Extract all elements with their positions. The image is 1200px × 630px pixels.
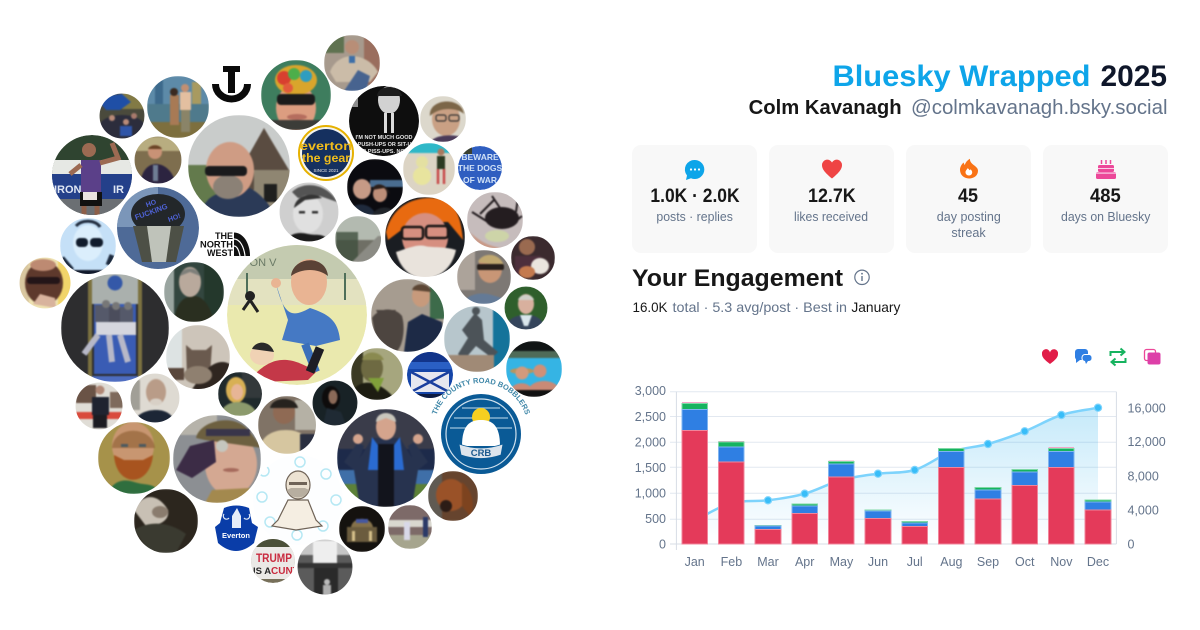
right axis labels: 8,000 (1128, 470, 1159, 484)
avatar: couple at night (347, 159, 403, 215)
avatar: Beware the Dogs of War sign: THE DOGS (458, 163, 503, 173)
month labels: Sep (977, 555, 999, 569)
heading: Your Engagement: Your Engagement (632, 265, 843, 292)
avatar: Everton crest (215, 506, 258, 551)
chart: monthly engagement stacked bars with cumulative line (635, 384, 1166, 569)
avatar: smiling bald man in navy (130, 373, 180, 423)
chart grid (670, 392, 1116, 550)
avatar: smiling man with glasses (420, 96, 466, 142)
right axis labels (1128, 401, 1166, 552)
left axis labels: 1,000 (635, 486, 666, 500)
avatar: Everton crest: Everton (222, 531, 250, 540)
avatar: seated man in beige (324, 35, 380, 91)
icon: likes heart (1042, 349, 1058, 364)
left axis labels: 2,000 (635, 436, 666, 450)
panel: day posting streak stat card: streak (951, 226, 986, 240)
month labels: Feb (721, 555, 742, 569)
avatar: dark long haired man (312, 380, 358, 426)
avatar: man in cap (258, 396, 317, 454)
panel: days on Bluesky stat card (1043, 145, 1168, 253)
avatar: tabby cat (166, 325, 232, 392)
avatar: snowman and elf on beach (403, 143, 455, 195)
avatar: caricature football mural (large): TON V (243, 257, 277, 269)
month labels: Dec (1087, 555, 1109, 569)
left axis labels: 500 (645, 512, 666, 526)
month labels: Mar (757, 555, 779, 569)
avatar: blond man with sunglasses (457, 250, 511, 304)
avatar: Beware the Dogs of War sign: OF WAR (463, 175, 497, 185)
avatar: man with dog (371, 279, 446, 352)
avatar: ironman runner: IR (113, 184, 124, 196)
right axis labels: 12,000 (1128, 435, 1166, 449)
avatar: man in suit on red seat (75, 382, 124, 430)
left axis labels: 1,500 (635, 461, 666, 475)
right axis labels: 0 (1128, 538, 1134, 552)
panel: likes received stat card: 12.7K (808, 186, 856, 207)
avatar: County Road Bobblers badge: THE COUNTY ROAD BOBBLERS (432, 378, 530, 414)
avatar: TRUMP IS A CUNT banner: CUNT (271, 566, 299, 577)
panel: posts and replies stat card: 1.0K · 2.0K (650, 186, 740, 207)
avatar: County Road Bobblers badge: CRB (471, 448, 491, 459)
text: engagement summary: January (851, 299, 900, 315)
avatar: football match (388, 505, 432, 549)
month labels: Apr (795, 555, 814, 569)
left axis labels: 0 (659, 538, 666, 552)
icon: chat bubble (685, 160, 704, 180)
text: engagement summary: total · 5.3 avg/post · Best in (672, 299, 847, 315)
avatar: man in suit with glass (134, 136, 182, 184)
subtitle: name and handle: @colmkavanagh.bsky.social (911, 97, 1168, 119)
avatar: fighter pilot helmet: HO (145, 199, 158, 209)
avatar: silent film star portrait (279, 182, 339, 242)
avatar: County Road Bobblers badge (432, 378, 530, 474)
avatar: I'm not much good poster: I'M NOT MUCH GOOD (356, 135, 412, 141)
logo: The North West: WEST (207, 248, 233, 259)
avatar: footballer wall mural (444, 306, 510, 372)
right axis labels: 4,000 (1128, 504, 1159, 518)
panel: posts and replies stat card (632, 145, 757, 253)
month labels: Jul (907, 555, 923, 569)
month labels: May (830, 555, 854, 569)
avatar: TRUMP IS A CUNT banner: TRUMP (256, 551, 292, 565)
avatar: man in flower hat (261, 60, 331, 132)
avatar: Beware the Dogs of War sign: BEWARE (461, 152, 499, 162)
panel: days on Bluesky stat card: days on Bluesky (1061, 210, 1151, 224)
avatar: fighter pilot helmet: FUCKING (134, 202, 169, 222)
icon: quotes squares (1144, 350, 1160, 364)
legend: engagement types (1042, 348, 1160, 366)
panel: days on Bluesky stat card: 485 (1090, 186, 1121, 207)
avatar: TRUMP IS A CUNT banner: IS A (253, 566, 271, 577)
month labels: Nov (1050, 555, 1073, 569)
badge: Everton the Gear: the gear (302, 151, 350, 165)
avatar: waterfront walkway (335, 216, 382, 262)
avatar: caricature football mural (large) (227, 245, 367, 385)
left axis labels: 3,000 (635, 384, 666, 398)
month labels: Oct (1015, 555, 1035, 569)
left axis labels (635, 384, 666, 552)
avatar: I'm not much good poster: AT PUSH-UPS OR SIT-UPS (349, 142, 419, 148)
logo: The North West: NORTH (200, 240, 233, 250)
avatar: man with glasses thinking (19, 257, 72, 309)
avatar: fighter pilot helmet (117, 187, 199, 269)
month labels: Jan (685, 555, 705, 569)
avatar: lit building at night (339, 506, 385, 552)
avatar: Beware the Dogs of War sign (458, 146, 503, 190)
subtitle: name and handle: Colm Kavanagh (749, 97, 902, 119)
stacked bars (682, 402, 1111, 544)
panel: posts and replies stat card: posts · replies (656, 210, 733, 224)
panel: day posting streak stat card: day posting (937, 210, 1001, 224)
avatar: red bearded portrait (98, 422, 170, 494)
avatar: I'm not much good poster: OR PISS-UPS. NOW (358, 149, 411, 155)
panel: avatar bubble cluster (20, 35, 562, 594)
badge: Everton the Gear: everton (300, 139, 352, 153)
icon: reposts arrows (1110, 348, 1126, 366)
badge: Everton the Gear (298, 125, 354, 181)
avatar: stained glass footballers (61, 274, 169, 382)
avatar: blonde woman in car (218, 372, 264, 416)
avatar: man with green scarf (351, 348, 403, 400)
avatar: I'm not much good poster (349, 86, 419, 156)
avatar: couple by marina (147, 76, 209, 138)
avatar: meditating figure with atoms (253, 455, 343, 545)
panel: likes received stat card: likes received (794, 210, 868, 224)
icon: T anchor logo (216, 66, 248, 99)
panel: likes received stat card (769, 145, 894, 253)
panel: day posting streak stat card (906, 145, 1031, 253)
subtitle: name and handle (749, 97, 1168, 119)
avatar: couple at pool (506, 341, 562, 397)
title: Bluesky Wrapped 2025: 2025 (1100, 60, 1167, 93)
badge: Everton the Gear: SINCE 2021 (313, 168, 339, 173)
avatar: dark cat sleeping (134, 489, 198, 553)
icon: heart (822, 160, 842, 178)
avatar: dark haired man in green (164, 262, 224, 322)
avatar: manager celebrating (337, 409, 435, 507)
icon: flame (960, 159, 978, 178)
avatar: santa in orange hat (385, 197, 465, 278)
avatar: older man in suit (504, 286, 548, 330)
title: Bluesky Wrapped 2025: Bluesky Wrapped (832, 60, 1090, 93)
left axis labels: 2,500 (635, 410, 666, 424)
avatar: officer with monocle (173, 415, 262, 503)
avatar: blue flag crowd (99, 93, 146, 139)
avatar: dreadlocks on grey (467, 192, 523, 250)
icon: replies chat bubbles (1075, 349, 1092, 364)
icon: cake (1096, 160, 1116, 179)
logo: The North West (200, 231, 250, 259)
avatar: black and white doorway (297, 539, 353, 596)
avatar: brown mastiff dog (428, 471, 478, 521)
panel: day posting streak stat card: 45 (958, 186, 978, 207)
avatar: baby and woman (511, 236, 555, 280)
avatar: bald man with sunglasses and stone hut (188, 115, 290, 217)
text: engagement summary (632, 299, 900, 315)
right axis labels: 16,000 (1128, 401, 1166, 415)
avatar: ironman runner: IRON (54, 184, 82, 196)
month labels (685, 555, 1109, 569)
avatar: blue stadium seats with saltire (407, 352, 453, 398)
month labels: Jun (868, 555, 888, 569)
icon: info (855, 270, 869, 284)
month labels: Aug (940, 555, 963, 569)
cumulative area (695, 408, 1098, 544)
avatar: TRUMP IS A CUNT banner (251, 539, 299, 583)
avatar: ironman runner (52, 135, 132, 219)
cumulative line (695, 404, 1102, 520)
text: engagement summary: 16.0K (632, 299, 668, 315)
avatar: pale blue face with sunglasses (60, 218, 116, 275)
logo: The North West: THE (215, 231, 233, 242)
avatar: fighter pilot helmet: HO! (167, 213, 182, 224)
